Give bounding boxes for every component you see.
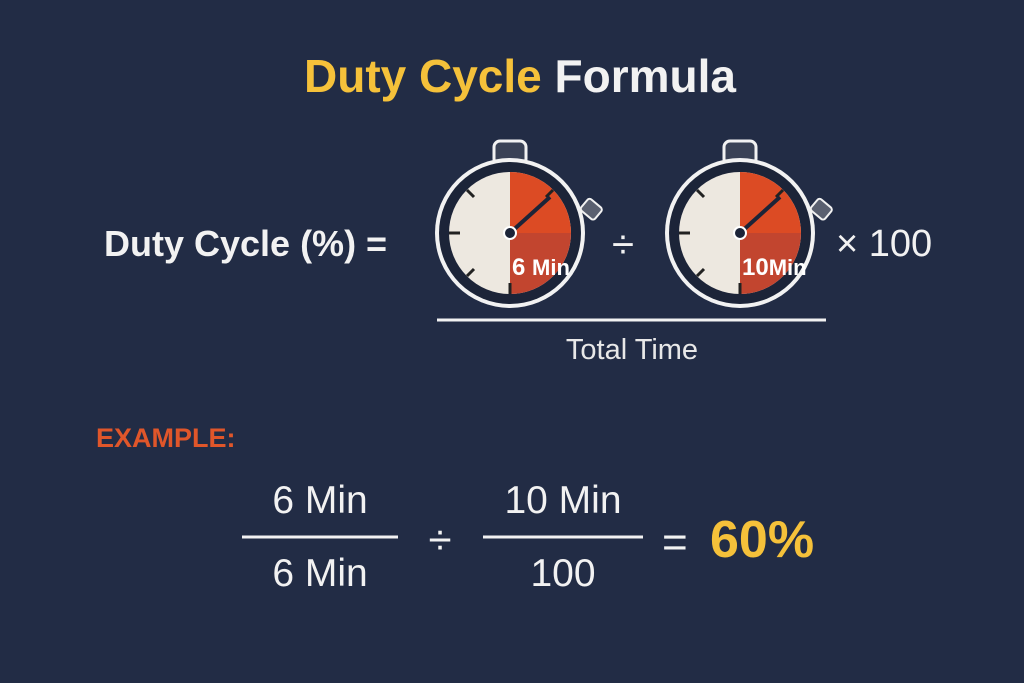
result (662, 511, 814, 569)
result: 60% (710, 511, 814, 569)
fraction line (437, 318, 826, 322)
icon: stopwatch 6 min (435, 141, 603, 308)
icon: stopwatch 10 min (665, 141, 833, 308)
formula label: Duty Cycle (%) = (104, 223, 387, 264)
example fraction 1: 6 Min (272, 479, 368, 522)
result: = (662, 518, 688, 567)
example fraction 1 (242, 479, 398, 595)
divide sign: ÷ (612, 223, 634, 267)
title: Duty Cycle Formula (304, 50, 736, 102)
denominator label: Total Time (566, 334, 698, 366)
divide sign example: ÷ (428, 516, 452, 563)
multiply 100: × 100 (836, 223, 932, 265)
icon: stopwatch 10 min: 10Min (742, 254, 807, 281)
example fraction 2 (483, 479, 643, 595)
example fraction 1: 6 Min (272, 552, 368, 595)
example heading: EXAMPLE: (96, 423, 236, 453)
icon: stopwatch 6 min: 6 Min (512, 254, 570, 281)
example fraction 2: 100 (530, 552, 596, 595)
example fraction 2: 10 Min (504, 479, 622, 522)
